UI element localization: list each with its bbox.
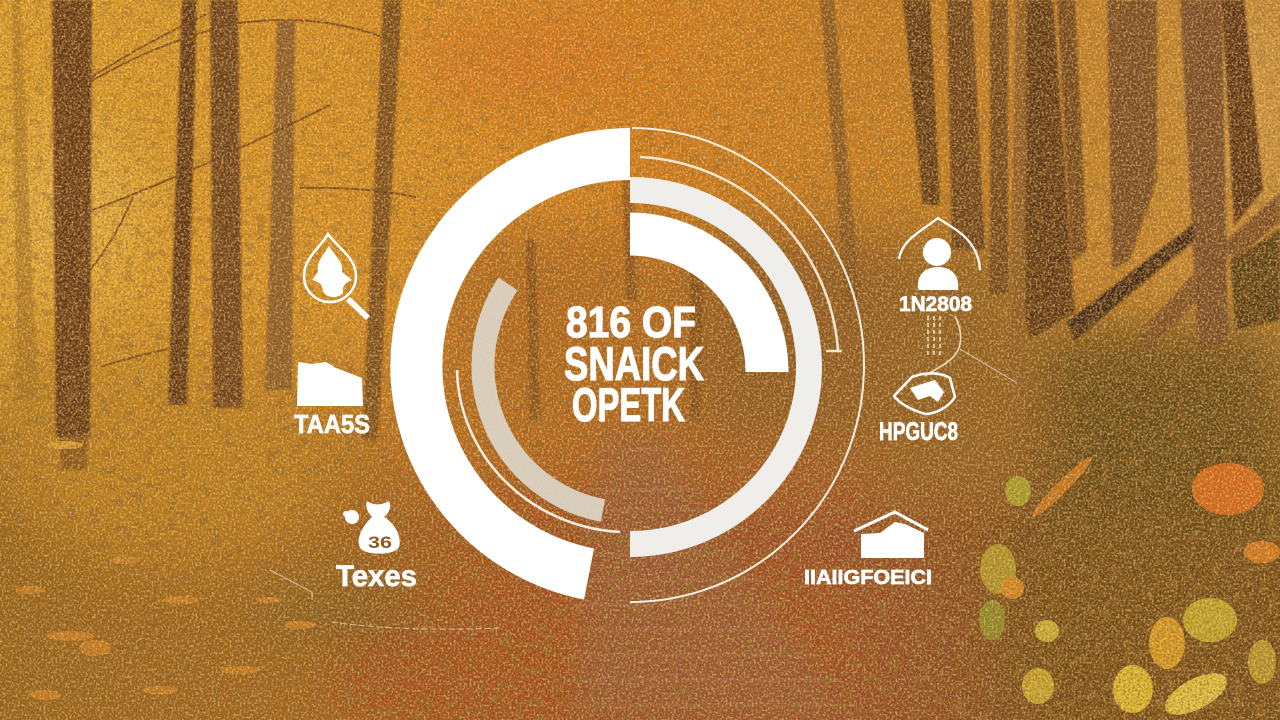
thin arc: outer ring (630, 128, 864, 602)
center title: SNAICK (564, 337, 704, 390)
center title: OPETK (572, 378, 685, 431)
interior trunks seen through ring (526, 180, 704, 420)
thin arc: second ring with tick (640, 157, 842, 351)
icon: money bag (343, 501, 400, 554)
center title: 816 OF (566, 298, 696, 347)
faint connector lines (270, 349, 1017, 629)
fallen leaves and foliage (16, 441, 1280, 720)
path ripple stripes (565, 450, 855, 705)
icon: money bag: 36 (368, 533, 392, 552)
forest path (575, 430, 850, 720)
icon: fan shield (894, 373, 955, 414)
label: Texes: Texes (336, 560, 417, 593)
center title (564, 298, 704, 431)
arc segment: large left ring (416, 154, 630, 574)
label: IIAIIGFOEICI: IIAIIGFOEICI (804, 567, 932, 589)
arc segment: inner left translucent (483, 284, 603, 510)
icon: person under arch (899, 218, 980, 290)
connector: dashed lines (925, 316, 961, 376)
arc segment: inner right quarter (630, 234, 767, 372)
icon: droplet with magnifier (304, 234, 370, 320)
icon: house (854, 512, 928, 558)
branches (83, 14, 416, 367)
arc segment: right ring (630, 190, 809, 544)
tree trunks (12, 0, 1280, 470)
thin arc: lower left (457, 370, 620, 532)
label: HPGUC8: HPGUC8 (879, 418, 958, 446)
radial chart (416, 128, 864, 602)
label: 1N2808: 1N2808 (899, 293, 972, 316)
icon: building block (297, 362, 363, 406)
label: TAA5S: TAA5S (294, 409, 370, 439)
